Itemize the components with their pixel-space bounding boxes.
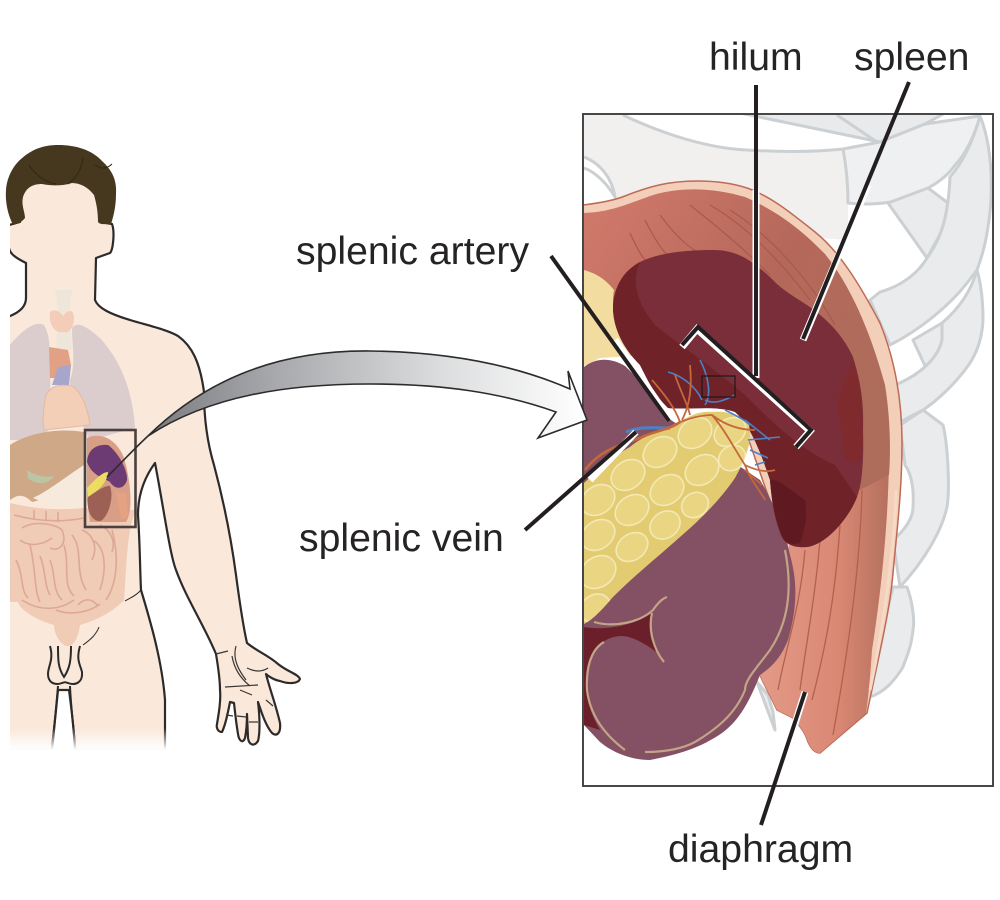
label lines [525,82,909,825]
label: hilum: hilum [709,36,803,79]
organs: heart [43,347,90,430]
hilum small box [702,376,735,397]
pale yellow tissue [584,270,632,366]
genitals [48,646,82,745]
diaphragm lower muscle [760,460,889,753]
leader: splenic artery [551,256,669,421]
leader: hilum [754,85,758,376]
body creases [83,590,141,645]
lower highlight [870,490,896,690]
diaphragm [583,181,902,753]
stomach fold [584,613,660,730]
ribs [584,113,991,730]
left edge mask [0,130,10,770]
hair [6,145,116,225]
selection box [85,430,136,527]
organs: trachea and thyroid [50,290,74,350]
label: splenic vein: splenic vein [299,517,504,560]
organs: lungs [10,324,135,440]
mini organs in selection box [87,436,130,522]
curved arrow to zoom panel [107,351,587,477]
spleen [613,250,863,547]
pancreas [574,411,751,628]
organs: liver and stomach [10,431,84,507]
stomach [584,360,795,760]
muscle fibres [630,205,835,325]
leader: splenic vein [525,432,636,530]
label: splenic artery: splenic artery [296,230,529,273]
label: spleen: spleen [854,36,969,79]
diaphragm rim [583,181,902,753]
leader: spleen [803,82,909,339]
splenic vein vessels [626,360,780,465]
pancreas lobules [584,416,747,622]
human figure [0,130,300,770]
stomach tan lines [587,550,789,752]
label: diaphragm: diaphragm [668,828,853,871]
splenic artery vessels [585,365,775,500]
zoom panel [574,113,993,786]
lower muscle fibres [778,490,862,735]
leader halos [590,185,868,765]
palm lines [216,646,273,722]
panel frame [583,114,993,786]
organs: intestines [10,503,136,646]
leader: diaphragm [761,692,805,825]
hilum bracket [682,327,811,447]
body silhouette [0,175,300,750]
bottom fade [0,728,172,750]
diaphragm dome muscle [584,189,890,490]
